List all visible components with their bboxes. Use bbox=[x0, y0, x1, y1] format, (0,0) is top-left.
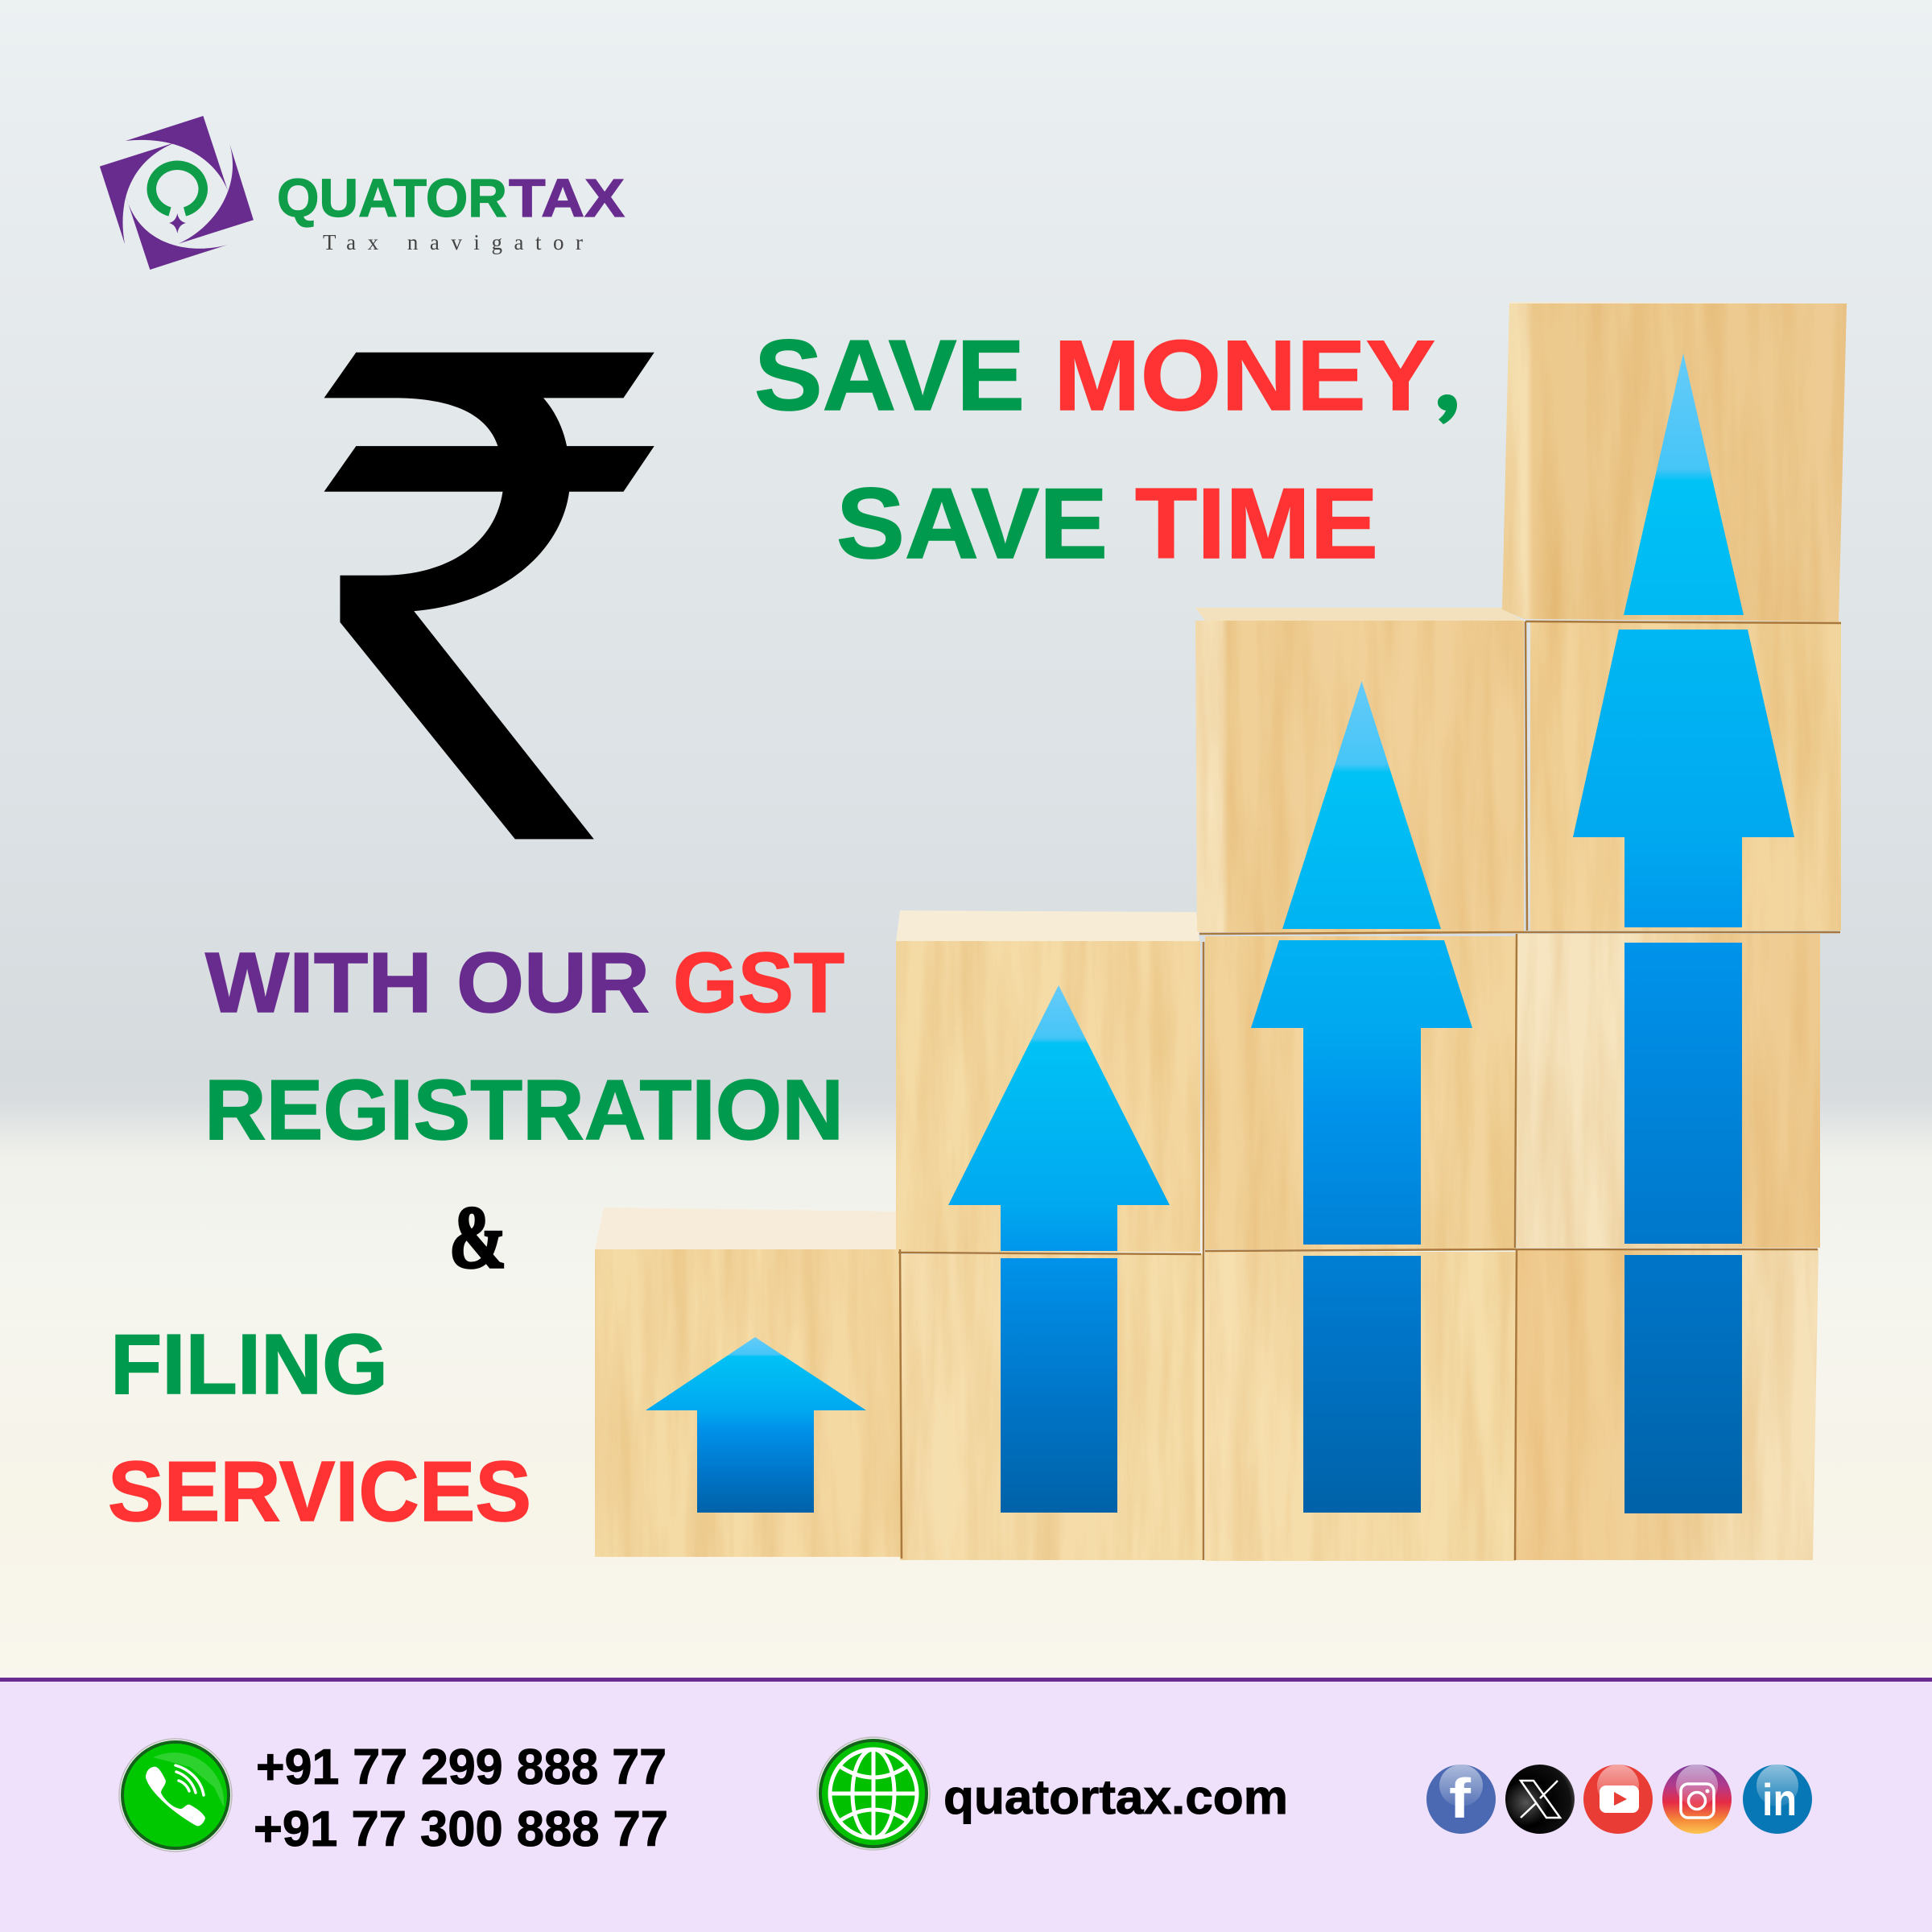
logo bbox=[100, 116, 625, 270]
phone numbers bbox=[254, 1740, 668, 1857]
phone numbers: +91 77 300 888 77 bbox=[254, 1802, 668, 1857]
footer panel bbox=[0, 1678, 1932, 1932]
heading: with our gst registration bbox=[204, 935, 844, 1158]
heading: save money, save time: SAVE bbox=[836, 469, 1108, 580]
icon: youtube bbox=[1583, 1765, 1653, 1834]
wooden block stack bbox=[595, 302, 1847, 1561]
icon: instagram bbox=[1662, 1765, 1732, 1834]
logo wordmark bbox=[277, 168, 625, 229]
arrow: block 1 bbox=[646, 1337, 866, 1513]
heading: save money, save time bbox=[754, 320, 1457, 580]
phone numbers: +91 77 299 888 77 bbox=[256, 1740, 667, 1795]
wood block faces bbox=[595, 303, 1847, 1561]
logo mark: purple star bbox=[169, 213, 186, 233]
arrow: block 3 bbox=[1251, 681, 1472, 1513]
icon: linkedin bbox=[1743, 1765, 1812, 1834]
icon: facebook: f bbox=[1449, 1767, 1472, 1830]
block seams bbox=[898, 621, 1841, 1560]
heading: with our gst registration: GST bbox=[673, 935, 844, 1030]
logo mark: green ring bbox=[151, 165, 203, 212]
logo wordmark: TAX bbox=[509, 168, 625, 229]
heading: save money, save time: MONEY bbox=[1054, 320, 1435, 431]
logo mark: purple pinwheel bbox=[100, 116, 254, 270]
icon: phone bbox=[119, 1739, 232, 1852]
heading: save money, save time: TIME bbox=[1135, 469, 1378, 580]
heading: with our gst registration: OUR bbox=[456, 935, 650, 1030]
ampersand: & bbox=[449, 1188, 506, 1286]
icon: linkedin: in bbox=[1762, 1774, 1797, 1825]
arrow: block 4 bbox=[1573, 353, 1794, 1513]
logo tagline: Tax navigator bbox=[323, 230, 583, 254]
heading: save money, save time: SAVE bbox=[754, 320, 1025, 431]
icon: globe bbox=[817, 1737, 930, 1850]
heading: filing: FILING bbox=[110, 1317, 388, 1412]
heading: services: SERVICES bbox=[108, 1444, 531, 1539]
top faces of blocks bbox=[595, 302, 1847, 1249]
heading: with our gst registration: WITH bbox=[205, 935, 432, 1030]
logo wordmark: QUATOR bbox=[277, 168, 507, 229]
icon: x bbox=[1505, 1765, 1575, 1834]
heading: with our gst registration: REGISTRATION bbox=[204, 1063, 844, 1158]
rupee symbol bbox=[324, 353, 654, 839]
arrow: block 2 bbox=[948, 985, 1170, 1513]
icon: facebook bbox=[1426, 1765, 1496, 1834]
website url: quatortax.com bbox=[943, 1770, 1288, 1824]
